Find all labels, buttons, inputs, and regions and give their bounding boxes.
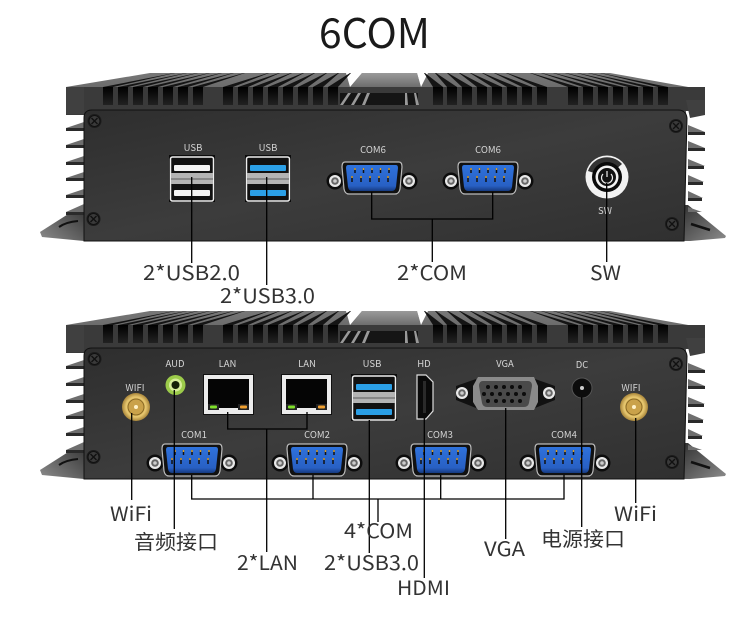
panel: bottom device rear view	[40, 311, 726, 479]
port: WiFi antenna right: WIFI	[621, 380, 641, 394]
port: COM6 right: COM6	[475, 142, 501, 156]
port: COM4: COM4	[551, 427, 577, 441]
port: COM2: COM2	[304, 427, 330, 441]
port: COM4	[520, 427, 610, 476]
port: USB 3.0: USB	[259, 140, 277, 154]
port: LAN 1	[203, 356, 254, 415]
label: 2*COM: 2*COM	[397, 257, 467, 286]
label: 2*USB2.0: 2*USB2.0	[143, 257, 240, 286]
icon: power switch: SW	[598, 203, 613, 217]
port: WiFi antenna right	[620, 380, 648, 421]
icon: power switch	[586, 156, 628, 217]
label: VGA: VGA	[484, 533, 526, 562]
port: USB 2.0	[169, 140, 215, 202]
panel: top device rear view	[40, 73, 726, 241]
port: COM6 left	[326, 142, 418, 194]
port: COM6 left: COM6	[360, 142, 386, 156]
port: HDMI: HD	[417, 356, 431, 370]
label: SW: SW	[590, 257, 621, 286]
label: WiFi left: WiFi	[110, 498, 152, 527]
port: COM3	[396, 427, 486, 476]
leader lines: top device	[192, 177, 607, 285]
label: HDMI: HDMI	[397, 572, 450, 601]
port: LAN 2	[281, 356, 332, 415]
port: DC power: DC	[576, 357, 588, 371]
port: LAN 1: LAN	[219, 356, 236, 370]
port: COM3: COM3	[427, 427, 453, 441]
port: COM1: COM1	[181, 427, 207, 441]
port: VGA: VGA	[496, 356, 514, 370]
leader lines: bottom device	[132, 390, 636, 578]
label: 4*COM: 4*COM	[344, 515, 413, 544]
label: 2*USB3.0 bottom: 2*USB3.0	[324, 547, 419, 576]
port: USB 3.0: USB	[363, 356, 381, 370]
label: power port: 电源接口	[541, 523, 625, 552]
port: WiFi antenna left: WIFI	[125, 380, 145, 394]
label: audio port: 音频接口	[134, 526, 218, 555]
port: WiFi antenna left	[122, 380, 150, 421]
port: USB 3.0	[351, 356, 397, 421]
port: VGA	[456, 356, 555, 410]
port: LAN 2: LAN	[298, 356, 316, 370]
port: COM6 right	[442, 142, 534, 194]
port: COM1	[146, 427, 238, 476]
port: audio jack: AUD	[165, 356, 185, 370]
title: 6COM	[319, 0, 430, 60]
label: WiFi right: WiFi	[614, 498, 657, 527]
port: USB 3.0	[245, 140, 291, 202]
label: 2*USB3.0: 2*USB3.0	[220, 280, 315, 309]
port: USB 2.0: USB	[184, 140, 202, 154]
port: DC power	[572, 357, 592, 398]
port: COM2	[272, 427, 362, 476]
port: HDMI	[417, 356, 433, 419]
chassis: bottom device	[40, 311, 726, 479]
label: 2*LAN: 2*LAN	[237, 547, 298, 576]
chassis: top device	[40, 73, 726, 241]
port: audio jack	[165, 356, 186, 395]
